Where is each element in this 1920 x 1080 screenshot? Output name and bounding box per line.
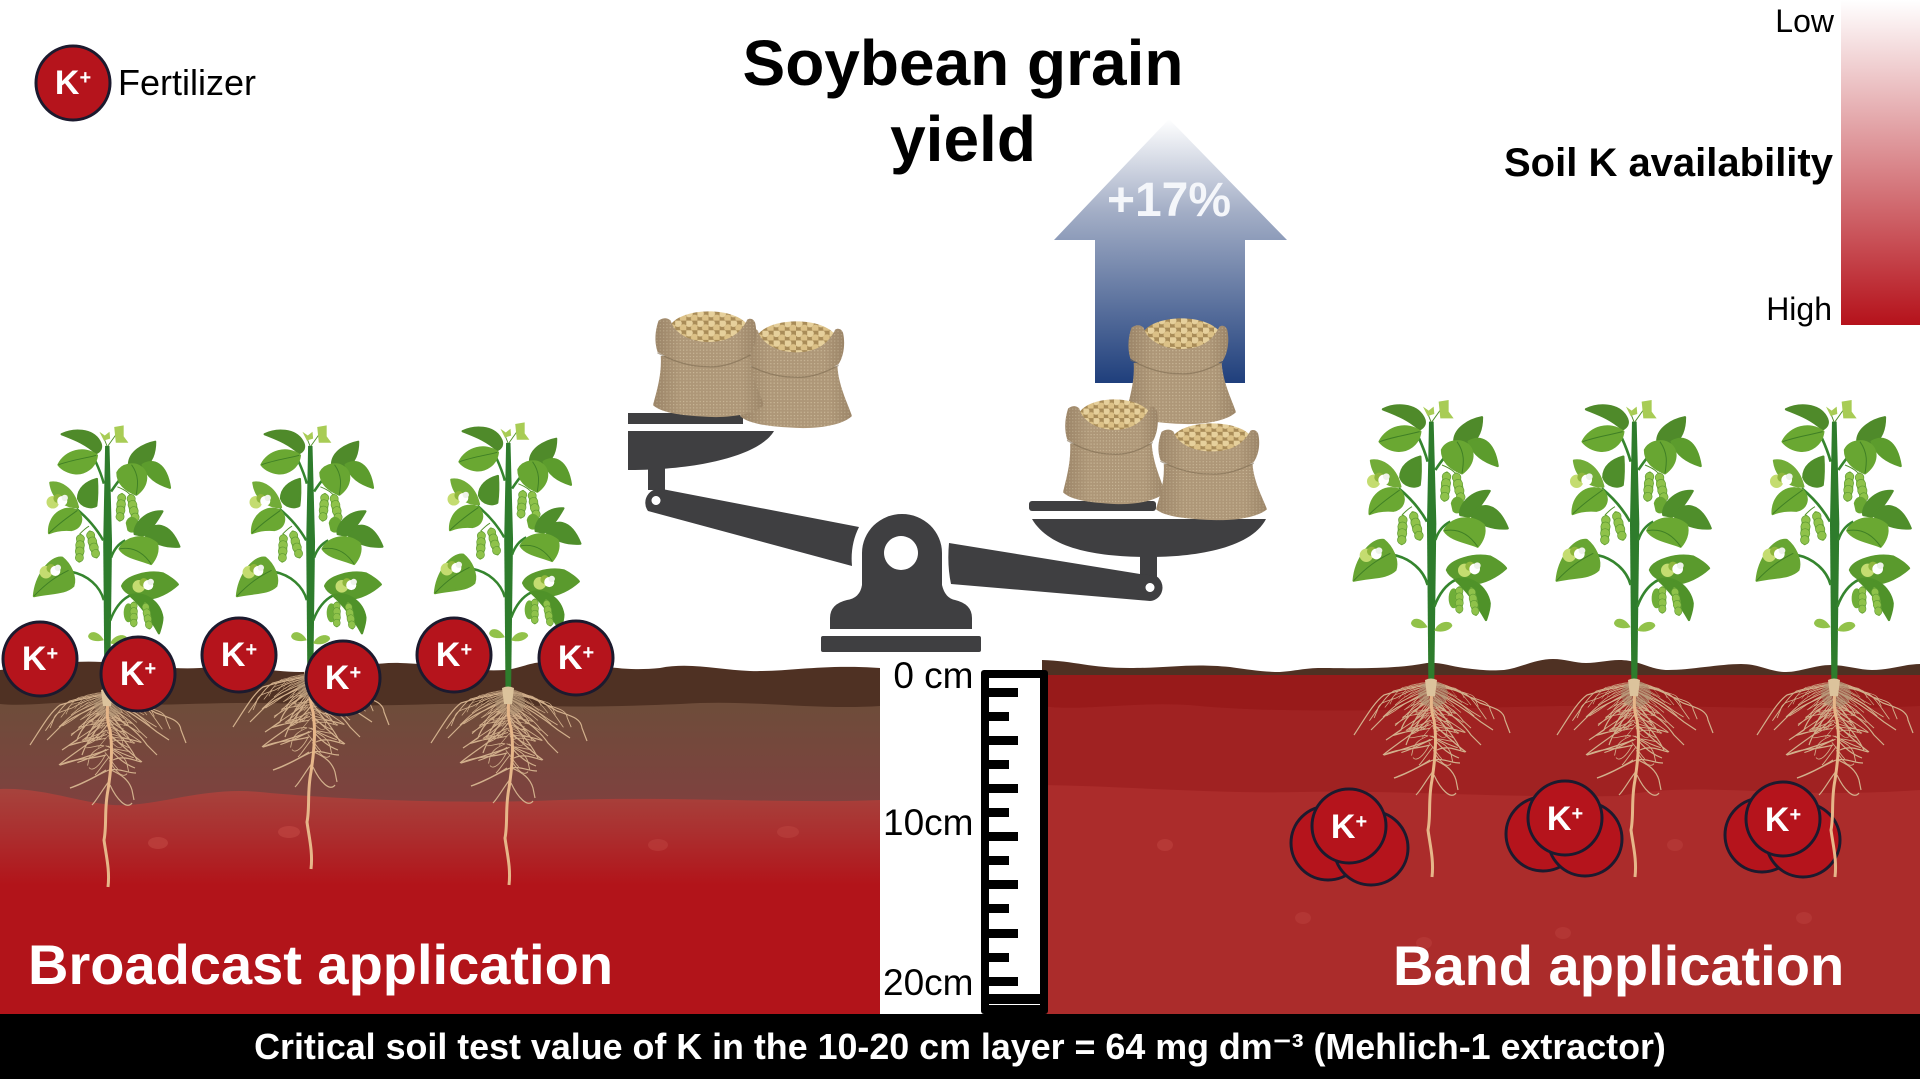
label: broadcast application: Broadcast application — [28, 933, 613, 996]
legend: soil K availability colour bar: Soil K availability — [1504, 141, 1834, 185]
fertilizer clusters: band placement: K — [1765, 801, 1789, 839]
fertilizer granules: broadcast on surface: + — [582, 642, 594, 664]
fertilizer clusters: band placement: + — [1355, 811, 1367, 833]
fertilizer clusters: band placement — [1291, 781, 1840, 885]
yield increase label: +17% — [1107, 174, 1231, 227]
legend: fertilizer: Fertilizer — [118, 62, 256, 103]
legend: fertilizer: + — [79, 67, 91, 89]
fertilizer granules: broadcast on surface: K — [325, 659, 349, 697]
plants: broadcast application — [30, 422, 587, 887]
depth ruler — [981, 670, 1048, 1014]
fertilizer granules: broadcast on surface: K — [120, 655, 144, 693]
legend: fertilizer: K — [55, 64, 79, 102]
bottom banner — [0, 1014, 1920, 1079]
legend: soil K availability colour bar: Low — [1775, 3, 1835, 39]
title: Soybean grain — [742, 27, 1184, 99]
depth labels — [883, 655, 974, 1003]
fertilizer granules: broadcast on surface — [3, 618, 613, 715]
fertilizer granules: broadcast on surface: K — [22, 640, 46, 678]
fertilizer clusters: band placement: K — [1331, 808, 1355, 846]
soil: band application — [1042, 659, 1920, 1014]
bottom banner: Critical soil test value of K in the 10-20 cm layer = 64 mg dm⁻³ (Mehlich-1 extractor) — [254, 1027, 1666, 1067]
fertilizer clusters: band placement: + — [1571, 803, 1583, 825]
depth labels: 0 cm — [893, 655, 974, 696]
depth gap background — [880, 655, 1042, 1014]
fertilizer granules: broadcast on surface: + — [144, 658, 156, 680]
grain bags: right pan — [1063, 318, 1267, 520]
plants: band application — [1354, 400, 1913, 877]
grain bags: left pan — [653, 311, 852, 428]
fertilizer granules: broadcast on surface: + — [46, 643, 58, 665]
balance scale — [628, 413, 1266, 652]
fertilizer granules: broadcast on surface: + — [349, 662, 361, 684]
yield increase arrow — [1054, 119, 1287, 383]
legend: soil K availability colour bar: High — [1766, 291, 1832, 327]
legend: fertilizer — [36, 46, 256, 120]
fertilizer granules: broadcast on surface: K — [558, 639, 582, 677]
fertilizer clusters: band placement: K — [1547, 800, 1571, 838]
fertilizer granules: broadcast on surface: K — [221, 636, 245, 674]
fertilizer granules: broadcast on surface: K — [436, 636, 460, 674]
fertilizer granules: broadcast on surface: + — [460, 639, 472, 661]
legend: soil K availability colour bar — [1504, 0, 1920, 327]
fertilizer clusters: band placement: + — [1789, 804, 1801, 826]
depth labels: 20cm — [883, 962, 974, 1003]
depth labels: 10cm — [883, 802, 974, 843]
title: yield — [890, 103, 1036, 175]
soil: broadcast application — [0, 662, 880, 1014]
label: band application: Band application — [1393, 934, 1844, 997]
fertilizer granules: broadcast on surface: + — [245, 639, 257, 661]
